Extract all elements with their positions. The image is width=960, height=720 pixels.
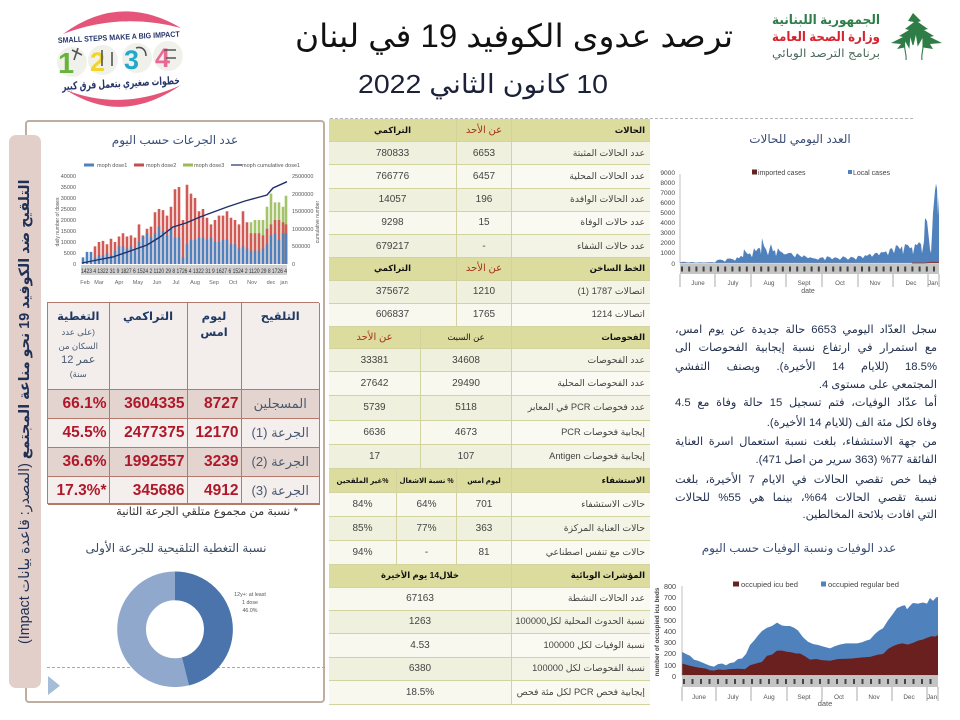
chart: daily doses: Mar xyxy=(94,280,104,286)
table: daily indicators: - xyxy=(482,240,486,252)
chart: daily cases: 5000 xyxy=(660,210,675,217)
table: daily indicators: 27642 xyxy=(361,378,388,389)
table: daily indicators: 14057 xyxy=(379,194,406,205)
table: daily indicators: 375672 xyxy=(376,286,409,297)
chart: hospital beds: Jan xyxy=(927,694,938,701)
chart: daily cases: 1000 xyxy=(660,250,675,257)
table: vaccination: سنة) xyxy=(70,369,87,379)
chart: daily cases: 9000 xyxy=(660,170,675,177)
text block: summary: من جهة الاستشفاء، بلغت نسبة استعمال اسرة العناية xyxy=(675,436,937,448)
text block: summary xyxy=(675,324,937,521)
chart: daily doses: 2000000 xyxy=(292,192,313,198)
table: vaccination: التغطية xyxy=(57,311,99,323)
table: daily indicators: اتصالات 1787 (1) xyxy=(578,286,645,296)
chart: daily cases: Oct xyxy=(835,280,845,287)
table: daily indicators: عدد حالات الشفاء xyxy=(577,240,645,250)
table: vaccination: 1992557 xyxy=(124,453,184,470)
chart: daily doses: Apr xyxy=(115,280,123,286)
chart: hospital beds: Dec xyxy=(903,694,915,701)
section: hotline xyxy=(329,258,650,280)
chart: daily doses: Aug xyxy=(190,280,200,286)
chart: daily doses: 0 xyxy=(73,262,76,268)
table: daily indicators: 5118 xyxy=(455,402,477,413)
chart: daily doses: 25000 xyxy=(61,207,76,213)
section: hospitalization xyxy=(329,469,650,493)
table: daily indicators: 6457 xyxy=(473,171,495,182)
chart: daily cases: 2000 xyxy=(660,240,675,247)
table: vaccination: 2477375 xyxy=(124,424,184,441)
table: vaccination: 4912 xyxy=(204,482,238,499)
chart: daily doses: 500000 xyxy=(292,244,310,250)
table: daily indicators: اتصالات 1214 xyxy=(592,309,645,319)
heading: first dose coverage: نسبة التغطية التلقيحية للجرعة الأولى xyxy=(85,541,267,555)
chart: daily cases: 7000 xyxy=(660,190,675,197)
chart: hospital beds: date xyxy=(818,699,832,708)
chart: daily cases: 4000 xyxy=(660,220,675,227)
chart: daily cases: Aug xyxy=(763,280,775,287)
logo: small steps make a big impact: 4 xyxy=(155,43,170,73)
ministry name: الجمهورية اللبنانية xyxy=(772,12,880,27)
ministry name: برنامج الترصد الوبائي xyxy=(772,48,880,61)
date heading: 10 كانون الثاني 2022 xyxy=(358,69,608,100)
table: daily indicators: 77% xyxy=(416,523,437,534)
text block: summary: الفائقة 77% (363 سرير من اصل 471). xyxy=(755,454,937,466)
table: daily indicators: 33381 xyxy=(361,354,388,366)
chart: daily cases: Sept xyxy=(798,280,811,287)
table: daily indicators: إيجابية فحوصات Antigen xyxy=(549,451,645,461)
chart: hospital beds: number of occupied icu beds xyxy=(654,587,661,676)
table: daily indicators: حالات مع تنفس اصطناعي xyxy=(546,547,645,557)
table: vaccination: المسجلين xyxy=(254,396,307,411)
table: vaccination: 345686 xyxy=(133,482,184,499)
chart: hospital beds: June xyxy=(692,694,706,701)
table: daily indicators: 766776 xyxy=(376,171,409,182)
table: vaccination: التلقيح xyxy=(261,311,300,323)
chart: daily doses: 0 xyxy=(292,262,295,268)
table: vaccination: 17.3%* xyxy=(57,482,106,499)
table: daily indicators: 6380 xyxy=(409,663,431,674)
table: daily indicators: نسبة الفحوصات لكل 100000 xyxy=(532,663,645,673)
table: vaccination: ليوم xyxy=(202,311,226,323)
chart: daily doses: 2500000 xyxy=(292,174,313,180)
chart: hospital beds: Sept xyxy=(797,694,811,701)
table: daily indicators: عدد الفحوصات المحلية xyxy=(557,378,645,388)
section: epidemiological indicators: خلال14 يوم الأخيرة xyxy=(381,570,459,580)
chart: hospital beds: 0 xyxy=(672,672,676,681)
logo: small steps make a big impact: 1 xyxy=(58,48,74,80)
table: daily indicators: 1210 xyxy=(473,286,495,297)
side banner xyxy=(9,135,41,688)
table: daily indicators: 196 xyxy=(476,194,492,205)
divider dashed xyxy=(47,667,325,668)
chart: coverage donut: 1 dose xyxy=(242,600,258,606)
table: daily indicators: 5739 xyxy=(363,402,386,413)
ministry name: وزارة الصحة العامة xyxy=(772,29,880,44)
table: vaccination: عمر 12 xyxy=(61,354,95,366)
chart: daily doses: daily number of doses xyxy=(55,197,61,246)
divider dashed top xyxy=(330,118,913,119)
table: vaccination: امس xyxy=(200,327,228,339)
chart: daily cases: 0 xyxy=(671,261,675,268)
table: daily indicators: 4.53 xyxy=(410,640,430,651)
table: daily indicators: 15 xyxy=(478,217,490,228)
chart: daily cases: June xyxy=(691,280,705,287)
table: vaccination: التراكمي xyxy=(123,311,173,323)
table: daily indicators: 1263 xyxy=(409,616,431,627)
section: hospitalization: % نسبة الاشغال xyxy=(399,478,454,484)
table: daily indicators: 94% xyxy=(352,547,373,558)
table: daily indicators: 4673 xyxy=(455,427,477,438)
table: daily indicators: 701 xyxy=(476,499,492,510)
logo: small steps make a big impact: 3 xyxy=(124,45,139,75)
chart: daily doses: 15000 xyxy=(61,229,76,235)
table: daily indicators: إيجابية فحوصات PCR xyxy=(561,427,645,437)
chart: hospital beds: 800 xyxy=(664,582,676,591)
table: vaccination: 3604335 xyxy=(124,395,184,412)
chart: daily doses: Jun xyxy=(153,280,161,286)
chart: hospital beds: July xyxy=(727,694,739,701)
logo: small steps make a big impact: خطوات صغيري بتعمل فرق كبير xyxy=(61,75,180,93)
chart: daily doses xyxy=(55,163,321,286)
section: tests: عن الأحد xyxy=(356,332,393,343)
side banner: التلقيح ضد الكوفيد 19 نحو مناعة المجتمع (المصدر: قاعدة بيانات Impact) xyxy=(17,179,33,644)
table: daily indicators: 780833 xyxy=(376,148,409,158)
table: daily indicators: 679217 xyxy=(376,240,409,252)
table: vaccination: 66.1% xyxy=(63,395,106,412)
section: tests: الفحوصات xyxy=(601,332,645,342)
text block: summary: التي افادت بلائحة المخالطين. xyxy=(802,509,937,521)
chart: hospital beds: 400 xyxy=(664,627,676,636)
chart: hospital beds: 700 xyxy=(664,593,676,602)
table: daily indicators: 6636 xyxy=(363,427,386,438)
chart: hospital beds: 500 xyxy=(664,616,676,625)
chart: daily doses: Oct xyxy=(229,280,238,286)
table: vaccination: السكان من xyxy=(59,341,98,351)
chart: daily doses: jan xyxy=(279,280,288,286)
chart: hospital beds: 100 xyxy=(664,661,676,670)
table: vaccination: 3239 xyxy=(204,453,238,470)
section: hospitalization: ليوم امس xyxy=(467,478,501,484)
chart: coverage donut: 12y+: at least xyxy=(234,592,266,598)
chart: daily doses: moph dose3 xyxy=(194,163,224,169)
table: vaccination: 12170 xyxy=(195,424,238,441)
panel: vaccination xyxy=(25,120,325,703)
chart: daily cases: 3000 xyxy=(660,230,675,237)
heading: daily doses: عدد الجرعات حسب اليوم xyxy=(112,133,238,147)
chart: daily doses: 30000 xyxy=(61,196,76,202)
chart: hospital beds: 200 xyxy=(664,649,676,658)
text block: summary: سجل العدّاد اليومي 6653 حالة جديدة عن يوم امس، xyxy=(675,324,937,336)
table: daily indicators: حالات العناية المركزة xyxy=(564,523,645,533)
chart: daily doses: 40000 xyxy=(61,174,76,180)
chart: daily cases: Jan xyxy=(928,280,939,287)
chart: daily cases: Dec xyxy=(905,280,917,287)
section: cases xyxy=(329,119,650,142)
chart: hospital beds: 600 xyxy=(664,604,676,613)
section: epidemiological indicators: المؤشرات الوبائية xyxy=(571,570,645,580)
chart: daily cases xyxy=(660,170,940,295)
chart: daily cases: Local cases xyxy=(853,170,890,177)
text block: summary: أما عدّاد الوفيات، فتم تسجيل 15 حالة وفاة مع 4.5 xyxy=(675,397,937,409)
table: vaccination xyxy=(47,302,319,504)
logo: small steps make a big impact xyxy=(57,11,183,107)
table: daily indicators: 18.5% xyxy=(406,687,434,698)
chart: daily doses: Jul xyxy=(172,280,180,286)
table: daily indicators xyxy=(329,119,650,705)
table: daily indicators: عدد الحالات النشطة xyxy=(568,593,645,603)
icon: cedar tree xyxy=(891,13,942,60)
text block: summary: 18.5% (للايام 14 الأخيرة). ويصنف التفشي xyxy=(675,360,937,372)
table: daily indicators: نسبة الوفيات لكل 100000 xyxy=(543,640,645,650)
table: daily indicators: 67163 xyxy=(406,593,434,604)
table: daily indicators: 85% xyxy=(352,523,373,534)
table: vaccination: 36.6% xyxy=(63,453,106,470)
section: cases: عن الأحد xyxy=(466,124,502,136)
table: daily indicators: 29490 xyxy=(452,378,480,389)
chart: daily doses: May xyxy=(133,280,143,286)
heading: daily cases: العدد اليومي للحالات xyxy=(749,132,851,146)
chart: daily doses: 20000 xyxy=(61,218,76,224)
table: vaccination: الجرعة (3) xyxy=(252,483,309,498)
table: daily indicators: 81 xyxy=(478,547,490,558)
table: daily indicators: 84% xyxy=(352,499,373,510)
chart: coverage donut: 46.0% xyxy=(242,608,258,614)
chart: daily doses: dec xyxy=(267,280,276,286)
table: daily indicators: 9298 xyxy=(381,217,404,228)
chart: daily doses: moph dose2 xyxy=(146,163,176,169)
table: vaccination: 8727 xyxy=(204,395,238,412)
heading: beds: عدد الوفيات ونسبة الوفيات حسب اليوم xyxy=(702,541,896,555)
chart: daily cases: date xyxy=(801,288,815,295)
chart: daily cases: Nov xyxy=(869,280,881,287)
text block: summary: وفاة لكل مئة الف (للايام 14 الأخيرة). xyxy=(767,417,937,429)
table: daily indicators: 363 xyxy=(476,523,492,534)
logo: ministry of public health xyxy=(772,12,942,61)
chart: daily doses: 1500000 xyxy=(292,209,313,215)
title: ترصد عدوى الكوفيد 19 في لبنان xyxy=(295,18,733,55)
chart: hospital beds: 300 xyxy=(664,638,676,647)
ministry name xyxy=(772,12,880,61)
table: daily indicators: عدد الحالات الوافدة xyxy=(570,194,645,204)
chart: daily doses: Feb xyxy=(80,280,90,286)
table: daily indicators: عدد الحالات المحلية xyxy=(569,171,645,181)
text block: summary: مع استمرار في ارتفاع نسبة إيجابية الفحوصات الى xyxy=(675,342,937,354)
table: vaccination: 45.5% xyxy=(63,424,106,441)
chart: coverage donut xyxy=(117,572,266,688)
logo: small steps make a big impact: 2 xyxy=(90,47,105,77)
table: daily indicators: حالات الاستشفاء xyxy=(581,499,645,509)
section: cases: الحالات xyxy=(615,124,645,134)
chart: daily doses: Sep xyxy=(209,280,219,286)
table: vaccination: الجرعة (2) xyxy=(252,454,309,469)
chart: daily doses: moph cumulative dose1 xyxy=(242,163,300,169)
table: daily indicators: إيجابية فحص PCR لكل مئة فحص xyxy=(517,687,645,697)
logo: small steps make a big impact: SMALL STEPS MAKE A BIG IMPACT xyxy=(58,30,180,45)
section: tests xyxy=(329,326,650,349)
chart: daily cases: 8000 xyxy=(660,180,675,187)
table: daily indicators: عدد الفحوصات xyxy=(587,354,645,364)
table: daily indicators: عدد حالات الوفاة xyxy=(580,217,645,227)
chart: daily doses: cumulative number xyxy=(315,201,321,243)
chart: daily doses: moph dose1 xyxy=(97,163,127,169)
chart: hospital beds xyxy=(654,580,938,708)
section: hotline: عن الأحد xyxy=(466,263,502,274)
chart: daily cases: imported cases xyxy=(758,170,806,177)
chart: daily doses: 1423 4 1322 31 9 1827 6 1524 2 1120 29 8 1726 4 1322 31 9 1627 6 1524 2 1120 29 8 1726 4 xyxy=(81,268,287,275)
chart: daily cases: 6000 xyxy=(660,200,675,207)
chart: hospital beds: Nov xyxy=(868,694,880,701)
table: daily indicators: 34608 xyxy=(452,354,480,366)
text block: summary: المجتمعي على مستوى 4. xyxy=(819,379,937,391)
chart: hospital beds: Aug xyxy=(763,694,775,701)
chart: hospital beds: occupied icu bed xyxy=(741,580,798,589)
section: tests: عن السبت xyxy=(447,332,485,342)
icon: triangle marker xyxy=(48,676,60,695)
chart: daily doses: 35000 xyxy=(61,185,76,191)
section: cases: التراكمي xyxy=(374,124,411,134)
table: daily indicators: عدد فحوصات PCR في المعابر xyxy=(528,402,645,412)
table: daily indicators: - xyxy=(425,547,428,558)
chart: hospital beds: occupied regular bed xyxy=(828,580,899,589)
table: daily indicators: عدد الحالات المثبتة xyxy=(573,148,645,158)
text block: summary: نسبة تقصي الحالات 64%، بينما هي 55% للحالات xyxy=(675,492,937,504)
table: daily indicators: 107 xyxy=(458,451,474,462)
chart: daily doses: 1000000 xyxy=(292,227,313,233)
text block: summary: فيما خص تقصي الحالات في الايام 7 الأخيرة، بلغت xyxy=(675,474,937,486)
table: daily indicators: 6653 xyxy=(473,148,495,158)
table: daily indicators: 606837 xyxy=(376,309,409,320)
chart: hospital beds: Oct xyxy=(834,694,844,701)
table: daily indicators: 64% xyxy=(416,499,437,510)
chart: daily cases: July xyxy=(727,280,739,287)
chart: daily doses: 5000 xyxy=(64,251,76,257)
table: daily indicators: 17 xyxy=(369,451,380,462)
section: hotline: التراكمي xyxy=(374,263,411,273)
section: hotline: الخط الساخن xyxy=(590,263,645,273)
table: vaccination: (على عدد xyxy=(62,327,95,337)
table: daily indicators: نسبة الحدوث المحلية لكل100000 xyxy=(515,616,645,626)
chart: daily doses: Nov xyxy=(247,280,257,286)
table: vaccination: الجرعة (1) xyxy=(252,425,309,440)
section: epidemiological indicators xyxy=(329,564,650,588)
section: hospitalization: %غير الملقحين xyxy=(337,478,388,484)
table: daily indicators: 1765 xyxy=(473,309,495,320)
footnote: * نسبة من مجموع متلقي الجرعة الثانية xyxy=(116,506,298,518)
section: hospitalization: الاستشفاء xyxy=(602,475,645,485)
chart: daily doses: 10000 xyxy=(61,240,76,246)
